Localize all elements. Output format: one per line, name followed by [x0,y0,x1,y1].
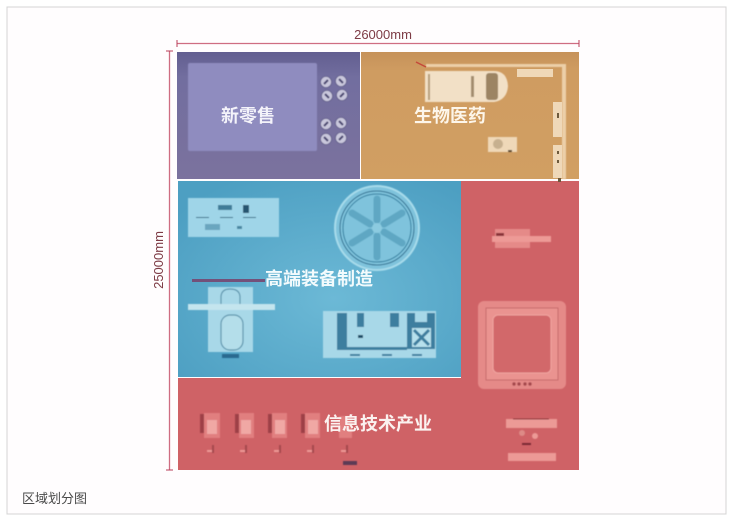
heading: information technology: 信息技术产业 [324,413,432,434]
height dimension: 25000mm [151,231,166,289]
icon: car booth [188,287,275,358]
icon: wall [426,64,566,179]
icon: stool group [320,76,348,144]
icon: dark bar [192,279,265,282]
caption: 区域划分图 [22,491,87,506]
icon: small booth [488,137,517,152]
icon: booth top right [492,229,551,248]
width dimension: 26000mm [354,27,412,42]
icon: control panel booth [188,198,279,237]
panel: information technology zone [178,181,579,470]
icon: vehicle [425,71,508,102]
heading: high-end equipment: 高端装备制造 [265,268,373,289]
panel: new retail zone [177,52,360,179]
panel: biomedicine zone [361,52,579,182]
panel: high-end equipment zone [178,181,461,377]
heading: new retail: 新零售 [221,105,275,126]
icon: machinery booth [323,311,436,358]
icon: retail booth [188,63,317,151]
icon: lower right booth [506,419,557,461]
icon: square booth [478,301,566,389]
icon: circular booth [335,186,419,270]
heading: biomedicine: 生物医药 [414,106,486,126]
icon: row of five machines [200,413,357,465]
